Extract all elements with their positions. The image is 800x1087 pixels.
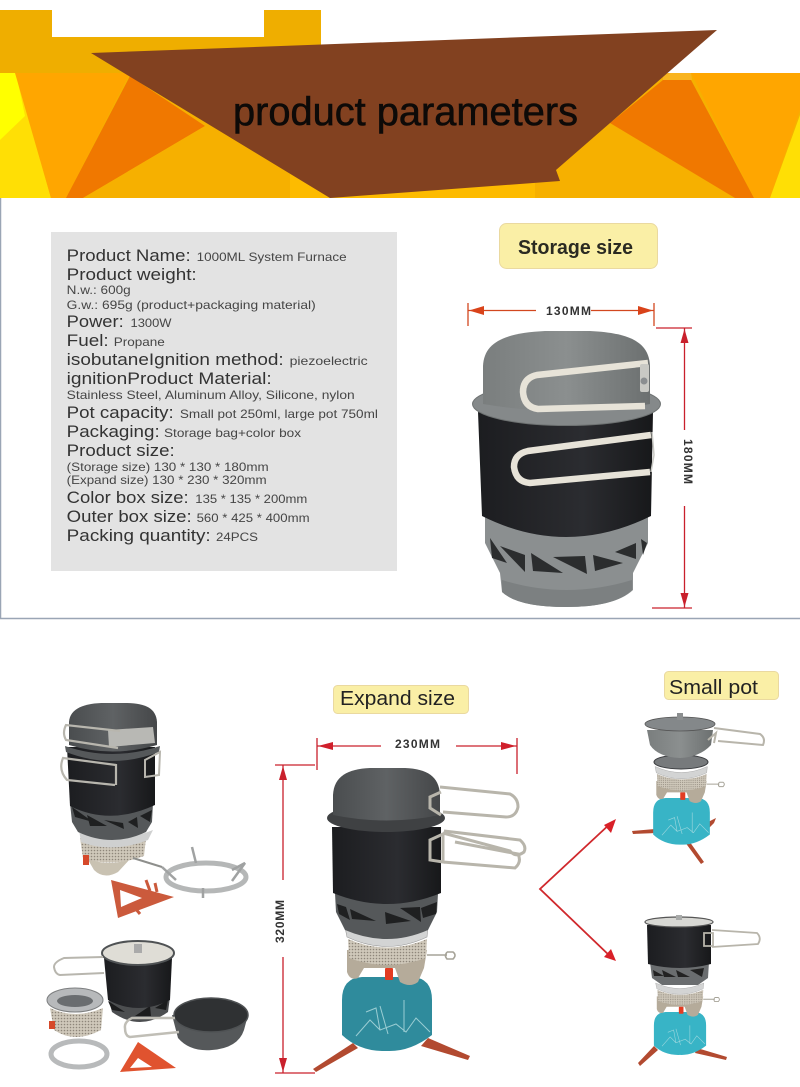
large pot (108, 997, 170, 1022)
wire (133, 858, 162, 867)
panel: product specifications: Propane (114, 335, 165, 349)
dimension: 320MM height (273, 765, 315, 1073)
panel: product specifications: (Expand size) 130 * 230 * 320mm (67, 473, 267, 487)
handles (430, 787, 518, 817)
dimension: 130MM width: 130MM (546, 304, 591, 318)
stand ring (51, 1041, 107, 1067)
brown title shape (91, 30, 717, 198)
label: expand size: Expand size (340, 688, 455, 710)
panel edge lines (0, 198, 800, 618)
panel: product specifications: Fuel: (67, 331, 109, 350)
arrows to small pot variants (540, 819, 616, 961)
dimension: 230MM width (317, 737, 517, 774)
pot stand ring (166, 863, 246, 891)
panel: product specifications: 135 * 135 * 200mm (195, 492, 307, 506)
panel: product specifications: Power: (67, 312, 124, 331)
panel: product specifications: isobutaneIgnition method: (67, 350, 284, 369)
panel: product specifications (51, 232, 397, 571)
label: small pot: Small pot (669, 677, 758, 699)
panel: product specifications: N.w.: 600g (67, 283, 131, 297)
panel: product specifications: Product Name: (67, 246, 191, 265)
black body (67, 747, 155, 816)
handle: lower (514, 435, 651, 483)
title: product parameters (233, 90, 578, 134)
photo: disassembled parts (47, 941, 248, 1072)
panel: product specifications: Packing quantity: (67, 526, 211, 545)
dimension: 320MM height: 320MM (273, 900, 287, 943)
panel: product specifications: G.w.: 695g (product+packaging material) (67, 298, 316, 312)
panel: product specifications: (Storage size) 130 * 130 * 180mm (67, 460, 269, 474)
panel: product specifications: Storage bag+color box (164, 426, 301, 440)
storage pot illustration (472, 331, 660, 607)
legs (313, 1038, 470, 1072)
panel: product specifications: Pot capacity: (67, 403, 174, 422)
expanded stove illustration (313, 768, 525, 1072)
burner (87, 858, 131, 876)
panel: product specifications: Product weight: (67, 265, 197, 284)
red legs (120, 1042, 176, 1072)
panel: product specifications: Outer box size: (67, 507, 192, 526)
panel: product specifications: ignitionProduct Material: (67, 369, 272, 388)
vents (490, 538, 647, 574)
top pot (69, 703, 157, 752)
panel: product specifications: Stainless Steel, Aluminum Alloy, Silicone, nylon (67, 388, 355, 402)
dimension: 180MM height: 180MM (681, 439, 695, 484)
panel: product specifications: piezoelectric (290, 354, 368, 368)
handle: upper (523, 363, 648, 409)
photo: assembled stove with parts (61, 703, 246, 918)
dimension: 130MM width (468, 303, 654, 326)
panel: product specifications: Small pot 250ml, large pot 750ml (180, 407, 378, 421)
label: storage size (500, 224, 658, 268)
panel: product specifications: 24PCS (216, 530, 258, 544)
panel: product specifications: 1300W (130, 316, 172, 330)
dimension: 180MM height (652, 328, 695, 608)
label: storage size: Storage size (518, 237, 633, 259)
header banner (0, 0, 800, 198)
large pot on stove (638, 915, 760, 1066)
panel: product specifications: 560 * 425 * 400mm (197, 511, 310, 525)
panel: product specifications: 1000ML System Furnace (197, 250, 347, 264)
grey vent section (70, 803, 153, 840)
label: small pot (664, 672, 778, 700)
handles (108, 727, 155, 747)
small pot on stove (632, 713, 764, 864)
dimension: 230MM width: 230MM (395, 737, 440, 751)
burner (50, 1008, 103, 1037)
panel: product specifications: Color box size: (67, 488, 189, 507)
panel: product specifications: Packaging: (67, 422, 160, 441)
small pot (172, 1015, 248, 1050)
red tripod legs (111, 880, 174, 918)
label: expand size (334, 686, 468, 714)
panel: product specifications: Product size: (67, 441, 175, 460)
